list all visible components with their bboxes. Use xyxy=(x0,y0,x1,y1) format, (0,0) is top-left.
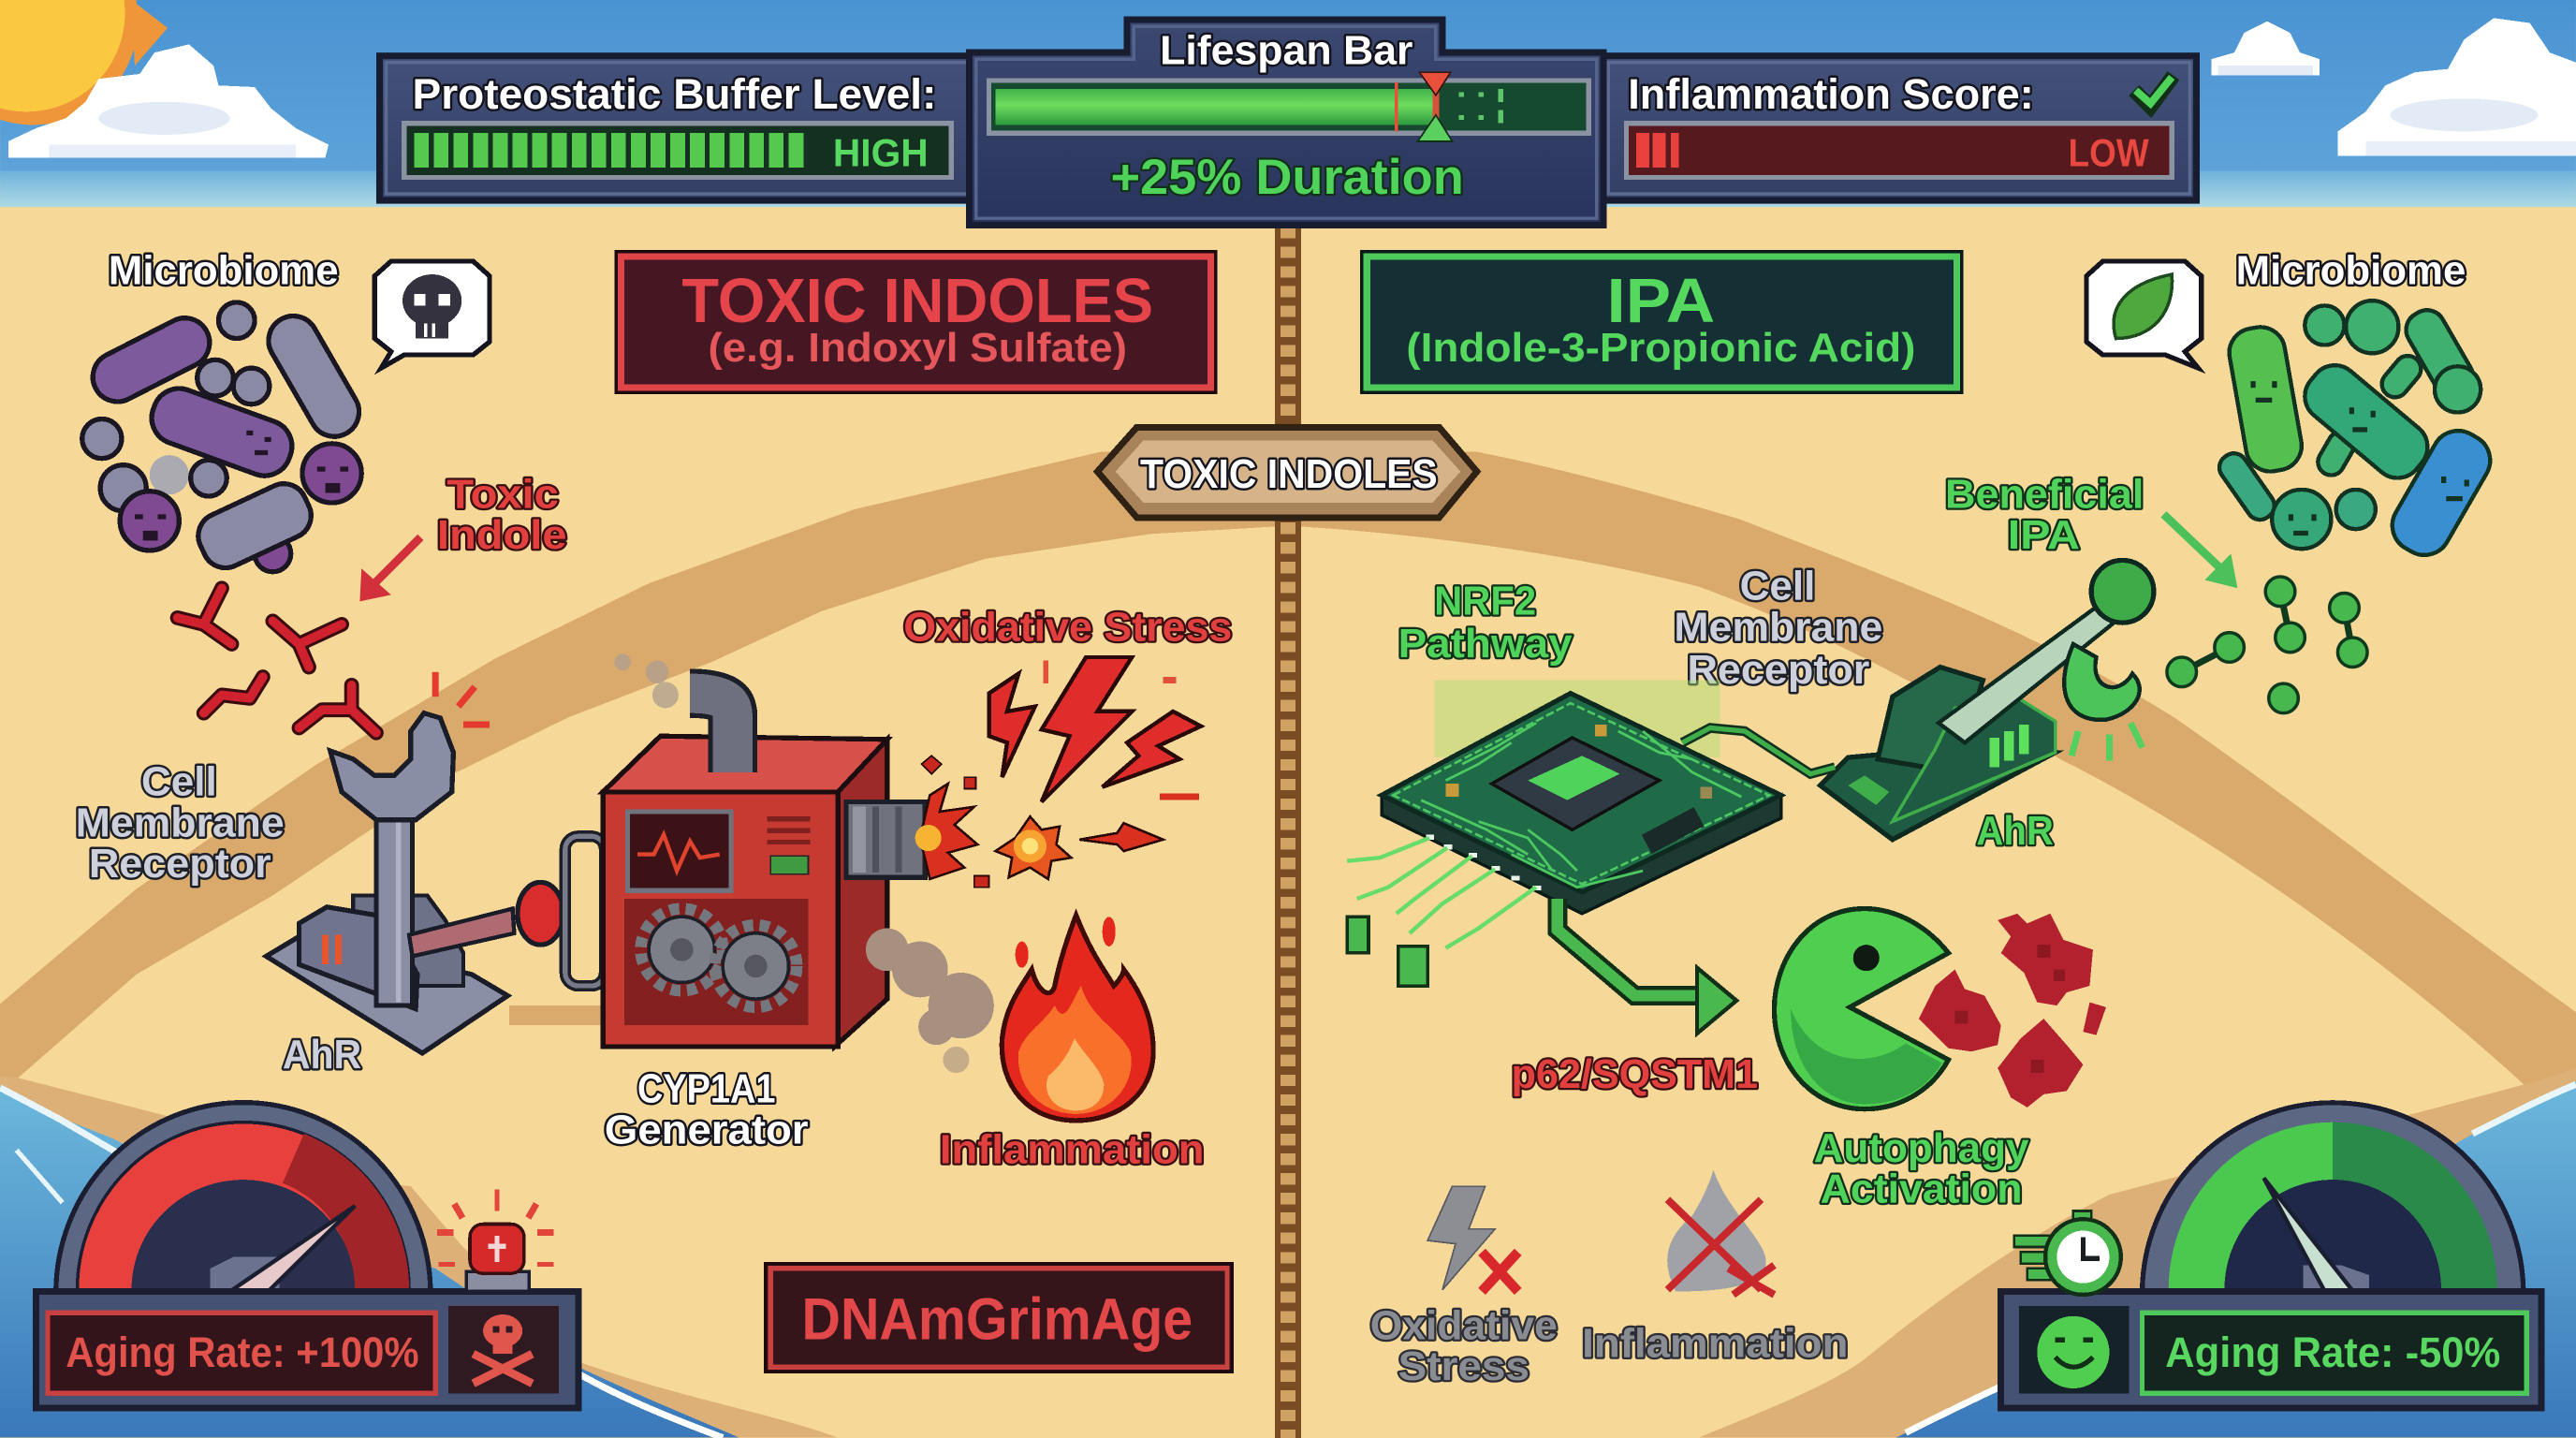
label box: DNAmGrimAge xyxy=(766,1264,1232,1372)
gauge: aging rate +100%: Aging Rate: +100% xyxy=(66,1328,419,1376)
handle xyxy=(565,836,605,986)
label: CYP1A1 generator xyxy=(605,1066,809,1152)
label: lifespan bar: Lifespan Bar xyxy=(1160,27,1412,73)
gauge needle xyxy=(230,1206,355,1308)
icon: sun xyxy=(0,0,168,125)
icon: winged stopwatch xyxy=(2014,1211,2121,1295)
sparks around receptor xyxy=(435,672,490,725)
label: beneficial IPA xyxy=(1945,471,2144,558)
icon: skull speech bubble xyxy=(374,261,490,368)
gears xyxy=(641,909,797,1007)
machine: CYP1A1 generator xyxy=(509,694,925,1047)
label: beneficial IPA: IPA xyxy=(2008,512,2080,558)
HUD panel: lifespan bar xyxy=(970,20,1603,225)
screen with pulse xyxy=(627,812,731,890)
arrow: toxic indole xyxy=(359,537,420,601)
gauge dial xyxy=(2143,1103,2524,1293)
heading: IPA xyxy=(1362,252,1962,392)
IPA molecules xyxy=(2167,577,2367,713)
vents and indicator xyxy=(768,816,810,874)
label: inflammation crossed: Inflammation xyxy=(1582,1321,1848,1367)
glow above chip xyxy=(1434,681,1720,757)
shoreline: right water xyxy=(1699,1068,2576,1438)
label: CYP1A1 generator: CYP1A1 xyxy=(637,1066,775,1112)
label: CYP1A1 generator: Generator xyxy=(605,1107,809,1152)
label: inflammation score: Inflammation Score: xyxy=(1628,70,2034,118)
gauge dial xyxy=(56,1103,431,1293)
output traces and batteries xyxy=(1347,838,1536,986)
value: high: HIGH xyxy=(833,130,929,174)
background: sky xyxy=(0,0,2576,178)
toxic indole molecules xyxy=(178,588,376,733)
heading: IPA: IPA xyxy=(1606,267,1715,336)
gauge: aging rate -50%: Aging Rate: -50% xyxy=(2165,1328,2500,1376)
HUD panel: inflammation score xyxy=(1602,56,2197,200)
icon: check mark xyxy=(2134,76,2174,107)
arrow: chip to autophagy xyxy=(1558,899,1736,1034)
cloud: small right xyxy=(2211,22,2320,76)
icon: autophagy pac-man xyxy=(1774,909,1949,1109)
label: toxic indole: Toxic xyxy=(446,471,559,517)
label: cell membrane receptor left: Cell xyxy=(141,758,217,804)
label: proteostatic buffer level: Proteostatic Buffer Level: xyxy=(413,70,936,118)
label: oxidative stress crossed: Stress xyxy=(1398,1343,1530,1389)
cloud: left xyxy=(8,44,329,157)
signpost: toxic indoles xyxy=(1097,427,1477,518)
sandy path: left arc xyxy=(0,452,1288,1097)
label: cell membrane receptor left: Membrane xyxy=(76,800,285,845)
label: p62/SQSTM1: p62/SQSTM1 xyxy=(1512,1051,1758,1097)
label: toxic indole xyxy=(437,471,567,558)
icon: lightning bolts xyxy=(989,657,1201,801)
smoke: puffs above generator xyxy=(614,654,679,708)
icon: reduced inflammation xyxy=(1667,1170,1774,1295)
label: cell membrane receptor right: Cell xyxy=(1740,564,1815,609)
exhaust nozzle xyxy=(846,801,925,877)
generator body xyxy=(603,736,887,1047)
icon: alarm siren xyxy=(437,1190,554,1291)
icon: leaf speech bubble xyxy=(2086,261,2202,368)
label: microbiome right: Microbiome xyxy=(2236,248,2466,294)
label: cell membrane receptor left: Receptor xyxy=(89,841,271,887)
label: oxidative stress crossed xyxy=(1370,1302,1558,1389)
lever: AhR toxic receptor xyxy=(266,713,564,1053)
cloud: large right xyxy=(2337,18,2576,156)
label: NRF2 pathway: NRF2 xyxy=(1434,578,1536,624)
heading: IPA: (Indole-3-Propionic Acid) xyxy=(1406,325,1915,371)
lever: AhR beneficial receptor xyxy=(1821,560,2154,840)
gauge: aging rate -50% xyxy=(2001,1103,2541,1408)
heading: toxic indoles: (e.g. Indoxyl Sulfate) xyxy=(708,325,1127,371)
pipe xyxy=(690,694,733,772)
gauge base xyxy=(2001,1291,2541,1408)
icon: reduced oxidative stress xyxy=(1427,1186,1518,1291)
label: autophagy activation xyxy=(1814,1125,2029,1212)
label: inflammation left: Inflammation xyxy=(940,1127,1204,1173)
icon box: skull and crossbones xyxy=(448,1306,559,1393)
bar: inflammation xyxy=(1627,124,2172,178)
heading: toxic indoles xyxy=(616,252,1216,392)
background: distant sea band xyxy=(0,171,2576,211)
bacteria cluster: toxic microbiome xyxy=(82,302,368,576)
label: oxidative stress: Oxidative Stress xyxy=(903,604,1232,650)
label: AhR right: AhR xyxy=(1976,808,2054,854)
heading: toxic indoles: TOXIC INDOLES xyxy=(681,267,1153,336)
label: AhR left: AhR xyxy=(283,1032,361,1078)
value: +25% duration: +25% Duration xyxy=(1110,150,1464,205)
protein aggregates xyxy=(1919,914,2106,1108)
label: beneficial IPA: Beneficial xyxy=(1945,471,2144,517)
label: microbiome left: Microbiome xyxy=(109,248,339,294)
bar: proteostatic buffer xyxy=(404,124,951,178)
label: autophagy activation: Activation xyxy=(1821,1167,2022,1212)
arrow: beneficial IPA xyxy=(2163,514,2237,588)
label: cell membrane receptor right xyxy=(1674,564,1882,693)
icon: flame xyxy=(1002,916,1153,1121)
label box: DNAmGrimAge: DNAmGrimAge xyxy=(802,1286,1193,1352)
HUD panel: proteostatic buffer xyxy=(379,56,974,200)
label: autophagy activation: Autophagy xyxy=(1814,1125,2029,1171)
gauge base xyxy=(37,1291,578,1408)
label: NRF2 pathway: Pathway xyxy=(1398,621,1573,667)
circuit board: NRF2 chip xyxy=(1382,694,1781,914)
icon: explosions xyxy=(915,661,1199,888)
label: cell membrane receptor right: Membrane xyxy=(1674,604,1882,650)
centre divider rope xyxy=(1275,227,1301,1438)
icon box: smiley xyxy=(2019,1306,2130,1393)
value: low: LOW xyxy=(2069,130,2149,174)
label: oxidative stress crossed: Oxidative xyxy=(1370,1302,1558,1348)
gauge: aging rate +100% xyxy=(37,1103,578,1408)
bacteria cluster: beneficial microbiome xyxy=(2215,301,2499,565)
faces on beneficial microbes xyxy=(2250,381,2469,536)
shoreline: left water xyxy=(0,1077,838,1438)
label: cell membrane receptor left xyxy=(76,758,285,887)
gear bay xyxy=(624,899,809,1025)
sandy path: right arc xyxy=(1288,452,2576,1134)
trace: chip to AhR xyxy=(1682,727,1835,774)
bar: lifespan xyxy=(989,72,1588,141)
label: NRF2 pathway xyxy=(1398,578,1573,667)
signal ticks xyxy=(2071,723,2143,761)
smoke: exhaust xyxy=(866,929,994,1073)
label: cell membrane receptor right: Receptor xyxy=(1687,647,1869,693)
value box xyxy=(2143,1313,2526,1393)
value box xyxy=(48,1313,435,1393)
faces on angry microbes xyxy=(135,431,348,540)
gauge needle xyxy=(2263,1178,2356,1306)
signpost: toxic indoles: TOXIC INDOLES xyxy=(1140,451,1438,497)
label: toxic indole: Indole xyxy=(437,512,567,558)
